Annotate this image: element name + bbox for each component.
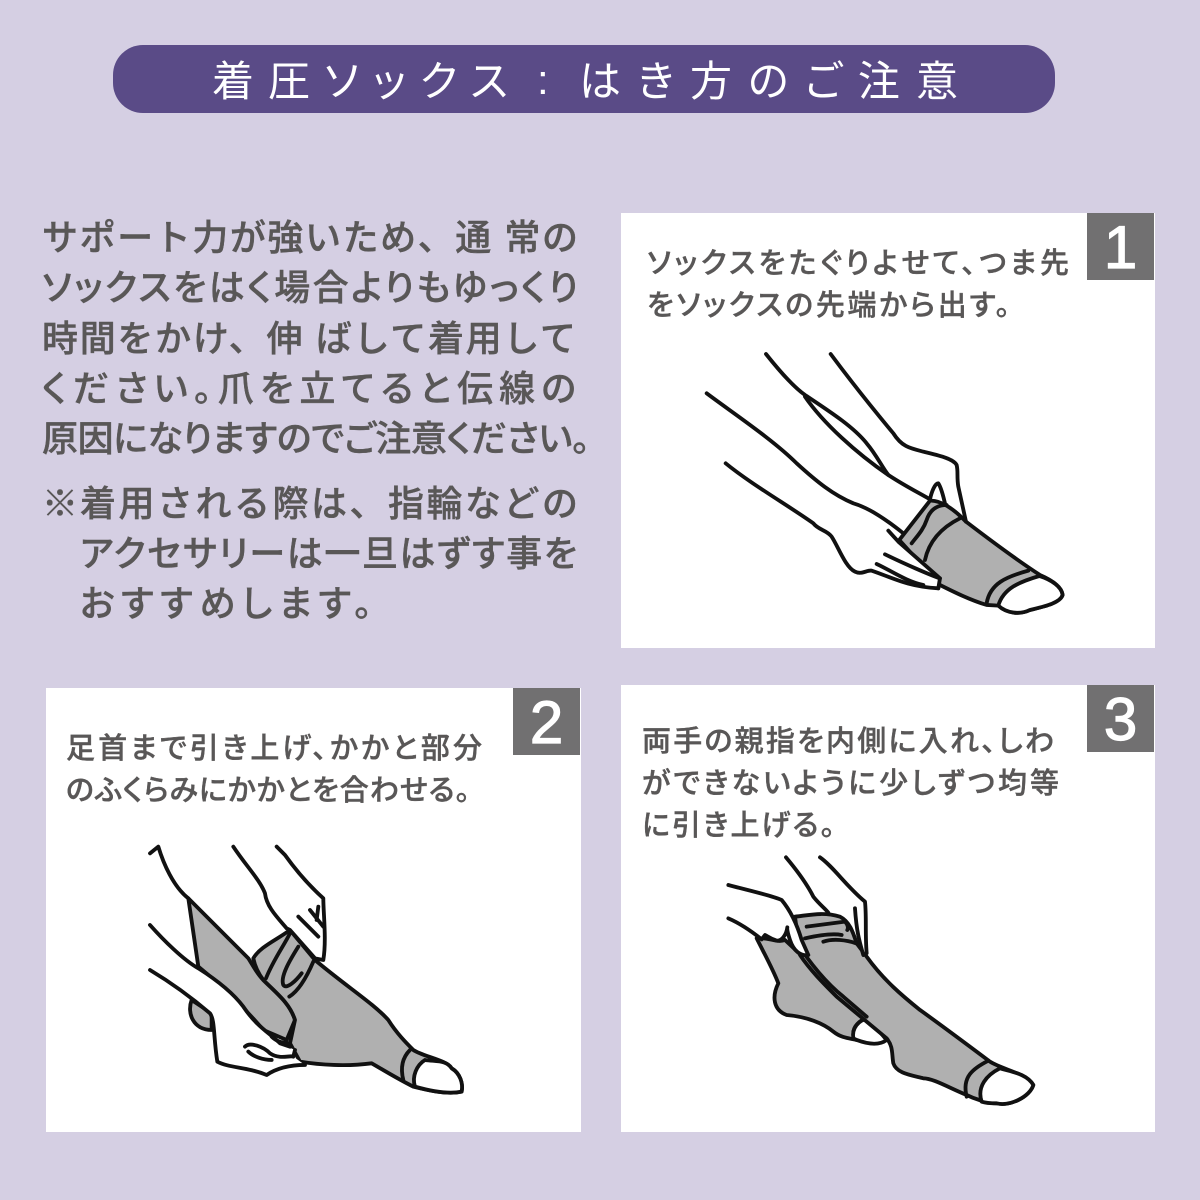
- badge: number 1: [1087, 213, 1154, 281]
- text block: usage caution: 時間をかけ、伸 ばして着用して: [42, 318, 576, 359]
- text block: usage caution: サポート力が強いため、通 常の: [42, 217, 578, 258]
- step 2 instructions: 足首まで引き上げ、かかと部分: [66, 732, 482, 765]
- text block: usage caution: ソックスをはく場合よりもゆっくり: [42, 267, 578, 308]
- badge: number 3: [1087, 685, 1154, 753]
- text block: usage caution: [42, 217, 590, 459]
- panel: step 1: [621, 213, 1155, 648]
- text block: accessory note: おすすめします。: [80, 583, 372, 624]
- text block: usage caution: 原因になりますのでご注意ください。: [42, 418, 590, 459]
- step 2 instructions: [66, 732, 482, 807]
- badge: number 1: 1: [1104, 214, 1137, 281]
- badge: number 2: 2: [530, 689, 563, 756]
- text block: accessory note: 着用される際は、指輪などの: [80, 483, 578, 524]
- badge: number 3: 3: [1104, 686, 1137, 753]
- title banner: [113, 45, 1055, 113]
- step 1 instructions: [647, 247, 1069, 322]
- illustration: pulling sock up evenly: [728, 857, 1033, 1104]
- text block: accessory note: ※: [42, 483, 78, 524]
- text block: accessory note: アクセサリーは一旦はずす事を: [80, 533, 577, 574]
- title banner: :: [537, 56, 549, 103]
- text block: accessory note: [42, 483, 578, 624]
- panel: step 2: [46, 688, 581, 1132]
- panel: step 3: [621, 685, 1155, 1132]
- step 3 instructions: に引き上げる。: [642, 809, 835, 842]
- title banner: 着圧ソックス: [212, 58, 508, 105]
- illustration: pulling sock over toes: [707, 354, 1063, 613]
- step 1 instructions: をソックスの先端から出す。: [647, 289, 1010, 322]
- illustration: pulling sock to the heel: [150, 847, 462, 1093]
- badge: number 2: [513, 688, 580, 756]
- step 1 instructions: ソックスをたぐりよせて、つま先: [647, 247, 1069, 280]
- text block: usage caution: ください。爪を立てると伝線の: [42, 368, 576, 409]
- step 2 instructions: のふくらみにかかとを合わせる。: [66, 774, 470, 807]
- title banner: はき方のご注意: [579, 58, 958, 105]
- step 3 instructions: 両手の親指を内側に入れ、しわ: [642, 725, 1054, 758]
- step 3 instructions: [642, 725, 1059, 842]
- step 3 instructions: ができないように少しずつ均等: [642, 767, 1059, 800]
